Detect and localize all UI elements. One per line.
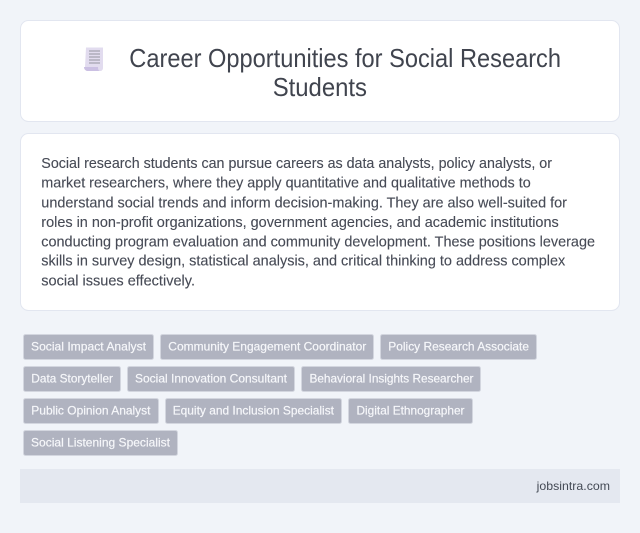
tag: Social Innovation Consultant [135,372,288,386]
tag: Social Impact Analyst [31,340,147,354]
title: Career Opportunities for Social Research [129,45,561,73]
text block: description: skills in survey design, statistical analysis, and critical thinking to address complex [41,254,566,270]
text block: description: market researchers, where they apply quantitative and qualitative methods to [41,176,531,192]
text block: description: understand social trends and inform decision-making. They are also well-suited for [41,195,567,211]
title [129,45,561,102]
tag list [24,334,536,456]
tag: Behavioral Insights Researcher [310,372,474,386]
tag [380,334,536,360]
tag [128,366,294,392]
tag: Public Opinion Analyst [31,404,151,418]
tag: Data Storyteller [31,372,113,386]
tag [302,366,480,392]
tag [24,430,178,456]
tag: Digital Ethnographer [356,404,464,418]
tag: Community Engagement Coordinator [168,340,366,354]
tag [160,334,374,360]
tag [348,398,472,424]
text block: description: roles in non-profit organizations, government agencies, and academic institutions [41,215,559,231]
tag [24,334,154,360]
tag: Social Listening Specialist [31,436,171,450]
tag [166,398,342,424]
text block: description: Social research students can pursue careers as data analysts, policy analysts, or [41,156,552,172]
text block: description [41,156,595,289]
footer [20,469,620,503]
icon: paper scroll [84,48,103,71]
tag: Policy Research Associate [388,340,529,354]
title: Students [273,74,367,102]
tag [24,398,158,424]
text block: description: conducting program evaluation and community development. These positions leverage [41,234,595,250]
footer source text: jobsintra.com [536,479,610,493]
panel: header [20,20,620,122]
panel: description [20,134,620,310]
tag: Equity and Inclusion Specialist [173,404,335,418]
tag [24,366,120,392]
text block: description: social issues effectively. [41,273,195,289]
